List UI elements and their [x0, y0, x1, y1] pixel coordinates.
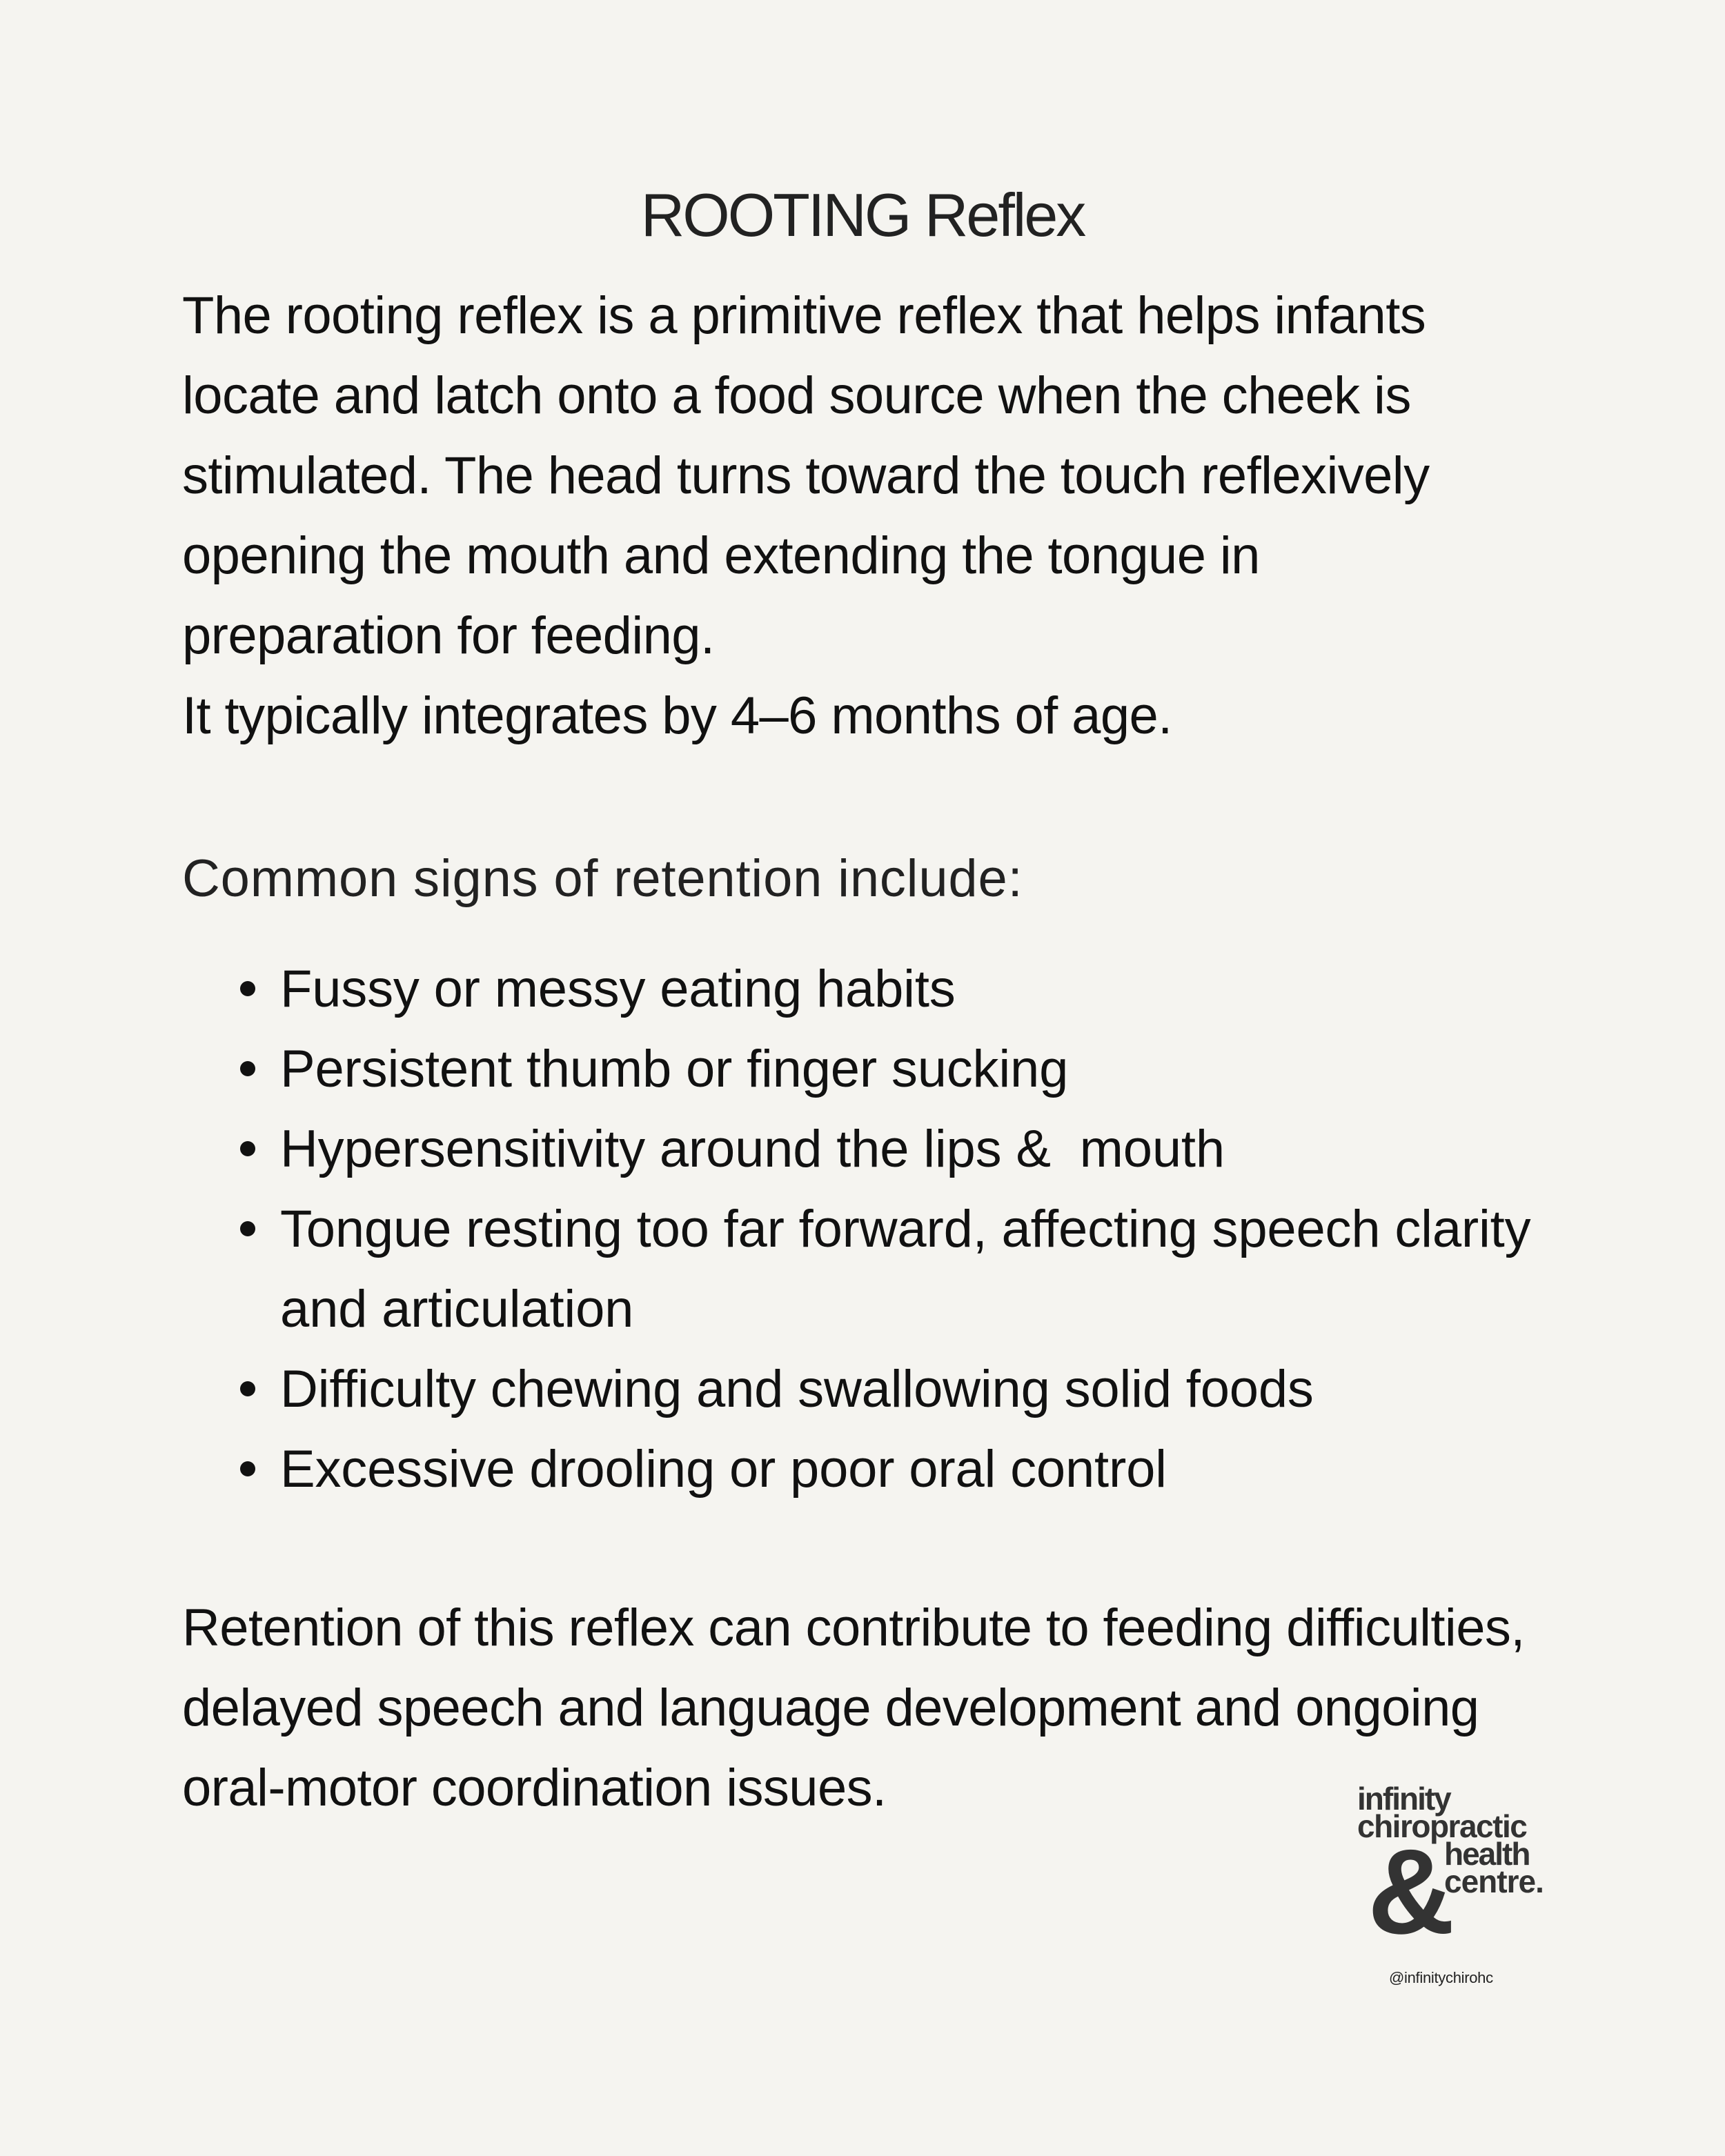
intro paragraph: It typically integrates by 4–6 months of age.: [182, 686, 1172, 745]
intro paragraph: opening the mouth and extending the tongue in: [182, 526, 1260, 585]
handle: @infinitychirohc: [1389, 1969, 1493, 1986]
bullet list: Fussy or messy eating habits: [280, 960, 956, 1018]
intro paragraph: locate and latch onto a food source when the cheek is: [182, 366, 1411, 425]
closing paragraph: Retention of this reflex can contribute to feeding difficulties,: [182, 1599, 1525, 1657]
title: ROOTING Reflex: [641, 181, 1084, 249]
closing paragraph: delayed speech and language development and ongoing: [182, 1679, 1479, 1737]
subheading: Common signs of retention include:: [182, 849, 1023, 908]
bullet list: Persistent thumb or finger sucking: [280, 1040, 1068, 1098]
bullet list: Tongue resting too far forward, affecting speech clarity: [280, 1200, 1530, 1258]
intro paragraph: stimulated. The head turns toward the touch reflexively: [182, 446, 1429, 505]
bullet list: Difficulty chewing and swallowing solid foods: [280, 1360, 1314, 1418]
logo: infinity: [1357, 1781, 1450, 1817]
logo: health: [1444, 1836, 1529, 1872]
bullet list: [240, 960, 1530, 1499]
icon: ampersand: &: [1368, 1825, 1455, 1959]
closing paragraph: oral-motor coordination issues.: [182, 1759, 887, 1817]
logo: [1357, 1781, 1544, 1986]
logo: centre.: [1444, 1863, 1544, 1899]
intro paragraph: [182, 286, 1430, 745]
intro paragraph: The rooting reflex is a primitive reflex that helps infants: [182, 286, 1426, 345]
intro paragraph: preparation for feeding.: [182, 606, 714, 665]
logo: chiropractic: [1357, 1808, 1526, 1844]
bullet list: Excessive drooling or poor oral control: [280, 1440, 1167, 1499]
bullet list: Hypersensitivity around the lips & mouth: [280, 1120, 1225, 1178]
bullet list: and articulation: [280, 1280, 633, 1338]
closing paragraph: [182, 1599, 1525, 1817]
